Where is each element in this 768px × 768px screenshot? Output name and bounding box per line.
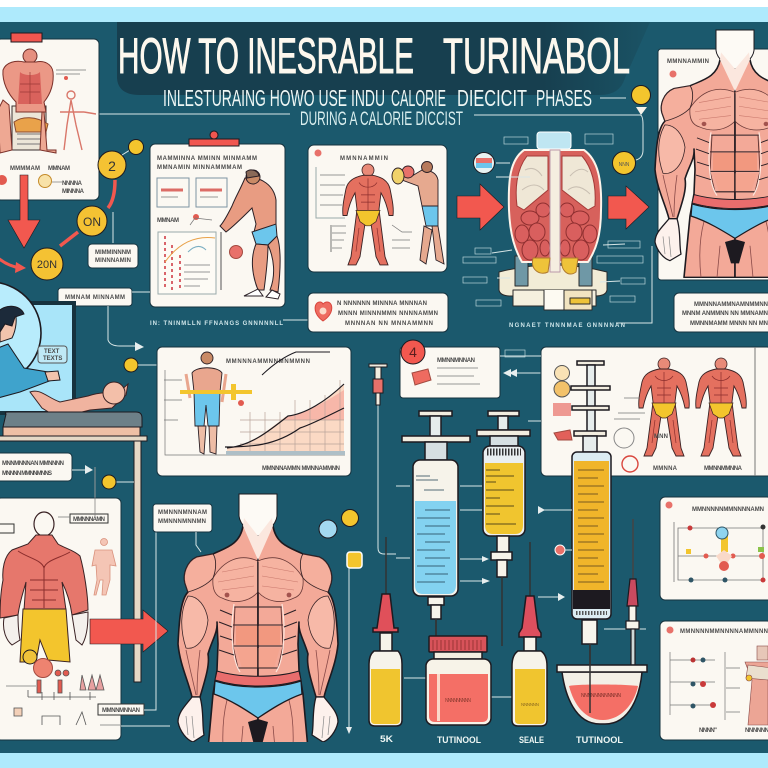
bottom labels: SEALE — [519, 735, 544, 745]
connectors — [108, 292, 150, 346]
base — [499, 256, 607, 310]
icon: yellow tag with drop line — [346, 552, 362, 734]
panel: right text box — [674, 293, 768, 332]
subtitle second line: DURING A CALORIE DICCIST — [300, 109, 463, 130]
syringe: blue — [402, 411, 470, 640]
callout small: MIMMINNNM — [95, 250, 131, 256]
jar: salmon: NNNNNNNNN — [445, 698, 471, 704]
subtitle: DIECICIT — [457, 85, 527, 111]
panel: figures comparison: MMNNA — [653, 466, 678, 472]
chart area — [225, 352, 345, 455]
panel: seated muscle figure: NNNNA — [62, 181, 83, 187]
arrow: right to organ — [457, 184, 504, 230]
man lifting — [220, 170, 280, 299]
arrow: right to torso — [608, 186, 649, 229]
panel: large red figure: MMNNMNNAN — [102, 708, 140, 714]
callout: torso label: MMNNNMNNAM — [158, 510, 207, 516]
chart in panel — [158, 232, 216, 294]
icon: title gold badge — [632, 86, 650, 115]
icon: pill circle — [474, 152, 494, 174]
panel: figures comparison: MMNNMMNNA — [704, 466, 743, 472]
small outline figure — [92, 538, 116, 595]
arrow: big right — [90, 610, 168, 652]
curved connector — [60, 180, 115, 246]
panel: network diagram: MMNNNNNMMNNNNAMN — [692, 507, 764, 513]
connector — [72, 467, 134, 515]
panel: exercise instructions — [150, 131, 285, 307]
connector — [283, 319, 308, 321]
syringe: yellow — [477, 411, 530, 646]
panel: progress chart: MMNNNAMMN MMNNAMMNN — [262, 466, 340, 472]
panel: right text box: MNNM ANMMNN NN MMNAMN — [682, 311, 768, 317]
needle right — [626, 519, 639, 665]
panel: figures comparison: MNN — [654, 434, 668, 440]
small red dot — [555, 545, 572, 555]
step 4 box — [400, 340, 500, 398]
callout: torso label — [153, 504, 212, 552]
arrow: down arrow — [8, 175, 40, 248]
step badge 20N: 20N — [37, 259, 57, 271]
callout small — [88, 212, 138, 268]
panel: chart and figure: NNNN" — [699, 728, 717, 734]
callout: table text — [0, 453, 72, 481]
panel: seated muscle figure: MMMMAM — [10, 166, 40, 172]
icon: yellow circle — [342, 510, 358, 526]
label box: MMNAM MINNAMM — [65, 295, 125, 301]
label box — [58, 288, 132, 306]
small anatomy figure — [60, 91, 96, 150]
syringe: tall yellow — [571, 361, 611, 714]
callout: torso label: MMNNNMNNMN — [158, 519, 206, 525]
arrow: curved small — [0, 258, 26, 273]
man holding ball — [392, 162, 444, 264]
organ diagram — [499, 132, 607, 310]
panel: exercise instructions: MMNAMIN MINNAMMMAM — [157, 165, 242, 171]
bottom labels: TUTINOOL — [437, 735, 481, 745]
panel: bodybuilder anatomy — [308, 145, 447, 272]
panel: figures comparison — [541, 347, 768, 476]
man with belt — [186, 352, 226, 454]
callout small: MINNNAMIN — [95, 258, 131, 264]
panel: large red figure: MMNNNAMN — [73, 517, 105, 523]
callout: table text: MNNNN MMNNMNNS — [2, 471, 52, 477]
bowl: NNNNNNNNNNNN — [581, 693, 621, 699]
panel: network diagram — [660, 497, 768, 600]
step 4 box: MMNNMNNAN — [437, 358, 475, 364]
patient — [30, 382, 128, 418]
panel: exercise instructions: MMNAM — [157, 218, 179, 224]
panel: bodybuilder anatomy: MMNNAMMIN — [340, 156, 388, 162]
jar: salmon — [426, 620, 491, 725]
bottle: centre yellow — [512, 542, 547, 726]
panel: heart callout — [308, 293, 448, 332]
panel: chart and figure: MMNNNNMMNNNNAMMNNN — [680, 629, 768, 635]
bottle: centre yellow: NNNNNN — [521, 702, 539, 707]
panel: exercise instructions: MAMMINNA MMINN MINMAMM — [157, 156, 257, 162]
icon: weight ball — [221, 232, 242, 290]
seated figure — [0, 49, 56, 153]
caption: IN: TNINMLLN FFNANGS GNNNNNLL — [150, 321, 283, 327]
figure fragment — [745, 646, 768, 725]
icon: blue circle — [319, 520, 337, 538]
organ caption: NGNAET TNNNMAE GNNNNAN — [509, 323, 625, 329]
step badge small — [102, 475, 116, 489]
icon: gold badge — [612, 152, 636, 174]
connectors among syringes — [396, 356, 646, 697]
panel: right text box: MMNNNAMMNAMNMMNN — [694, 302, 768, 308]
organ lobes — [515, 203, 597, 260]
callout: table text: MNNMNNNAN MMNNNN — [2, 461, 64, 467]
panel: right text box: MMNNMAMM MNNN NN MN — [690, 321, 768, 327]
monitor and doctor scene — [0, 282, 128, 418]
panel: progress chart — [157, 347, 351, 476]
step badge ON — [77, 206, 107, 236]
connector — [121, 528, 170, 726]
panel: progress chart: MMNNNAMMNNMNMMNN — [226, 359, 310, 365]
subtitle: CALORIE — [391, 85, 446, 111]
panel: heart callout: MNNN MINNNMMN NNNNAMMN — [338, 311, 438, 317]
arrow heads — [482, 506, 565, 601]
arrow head — [85, 465, 93, 474]
arrow head — [135, 342, 144, 351]
small syringe left with line — [369, 364, 396, 554]
panel: large red figure — [0, 467, 144, 740]
small label above step box — [505, 350, 525, 357]
panel: seated muscle figure: MMNAM — [48, 166, 70, 172]
bottom labels: TUTINOOL — [576, 735, 624, 745]
subtitle: PHASES — [536, 85, 592, 111]
panel: heart callout: MNNNAN NN MNNAMMNN — [345, 321, 433, 327]
step badge 2 — [98, 151, 126, 179]
monitor and doctor scene: TEXT — [44, 349, 60, 355]
icon: gold badge: NNN — [619, 162, 630, 168]
organ labels — [463, 134, 645, 306]
step 4 box: 4 — [409, 344, 417, 360]
step badge small — [124, 358, 157, 372]
step badge ON: ON — [83, 215, 101, 229]
bowl — [557, 645, 647, 724]
panel: heart callout: N NNNNNN MINNNA MNNNAN — [337, 301, 427, 307]
panel: top right torso: MMNNAMMIN — [667, 59, 709, 65]
mini chart — [14, 670, 104, 725]
muscle figure — [0, 512, 88, 662]
bottle: left yellow — [369, 537, 402, 726]
treatment table — [0, 412, 147, 682]
title: TURINABOL — [443, 28, 630, 84]
title: HOW TO INESRABLE — [118, 28, 414, 84]
panel: top right torso — [655, 30, 768, 280]
step badge small — [122, 140, 144, 155]
monitor and doctor scene: TEXTS — [43, 356, 62, 362]
bottom labels: 5K — [380, 734, 394, 744]
connector lines — [492, 163, 652, 323]
large torso — [178, 494, 338, 760]
title banner — [117, 22, 650, 95]
connector lines near title — [98, 98, 643, 160]
doctor — [0, 306, 60, 398]
step badge 20N — [31, 248, 63, 280]
bottom labels — [380, 734, 624, 745]
panel: chart and figure — [660, 621, 768, 740]
panel: seated muscle figure — [0, 33, 99, 200]
step badge 2: 2 — [108, 158, 116, 174]
subtitle: INLESTURAING HOWO USE INDU — [163, 85, 385, 111]
panel: seated muscle figure: MINNNA — [62, 189, 85, 195]
arrow: to step box — [503, 369, 541, 377]
